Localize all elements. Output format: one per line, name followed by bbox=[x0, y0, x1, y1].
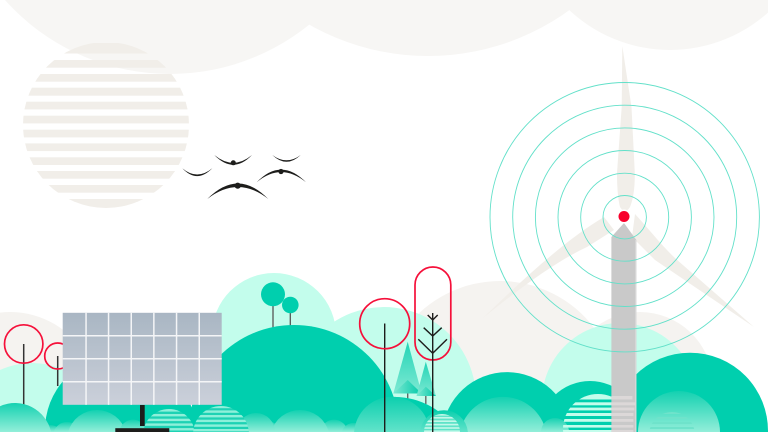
mint hills bbox=[0, 273, 698, 432]
dim bushes under trees bbox=[354, 397, 468, 432]
panel cells bbox=[63, 313, 222, 405]
striped bush three bbox=[424, 414, 460, 432]
green hills bbox=[45, 325, 768, 432]
turbine tower bbox=[611, 223, 636, 432]
wind turbine blades bbox=[483, 46, 754, 327]
pole and red ring tree left bbox=[4, 325, 43, 405]
striped sun bbox=[23, 43, 189, 208]
gradient bushes bbox=[0, 391, 720, 432]
birds bbox=[182, 155, 306, 199]
red ring tree centre bbox=[360, 299, 410, 432]
clouds bbox=[0, 0, 768, 74]
round green trees bbox=[261, 282, 299, 330]
conifer trees bbox=[393, 342, 436, 404]
faint stripes on right bush bbox=[649, 412, 695, 429]
solar panel bbox=[63, 313, 222, 432]
striped bush four bbox=[563, 394, 612, 432]
branching tree with red capsule bbox=[415, 267, 451, 432]
panel post bbox=[140, 405, 145, 426]
striped bush two bbox=[193, 406, 249, 432]
small red ring tree bbox=[45, 343, 71, 386]
beige background hills bbox=[0, 281, 713, 432]
red hub bbox=[617, 210, 631, 224]
concentric signal rings bbox=[490, 82, 759, 352]
stripes over tower bbox=[611, 396, 635, 432]
panel base bbox=[115, 428, 169, 432]
striped bush one bbox=[143, 409, 195, 432]
